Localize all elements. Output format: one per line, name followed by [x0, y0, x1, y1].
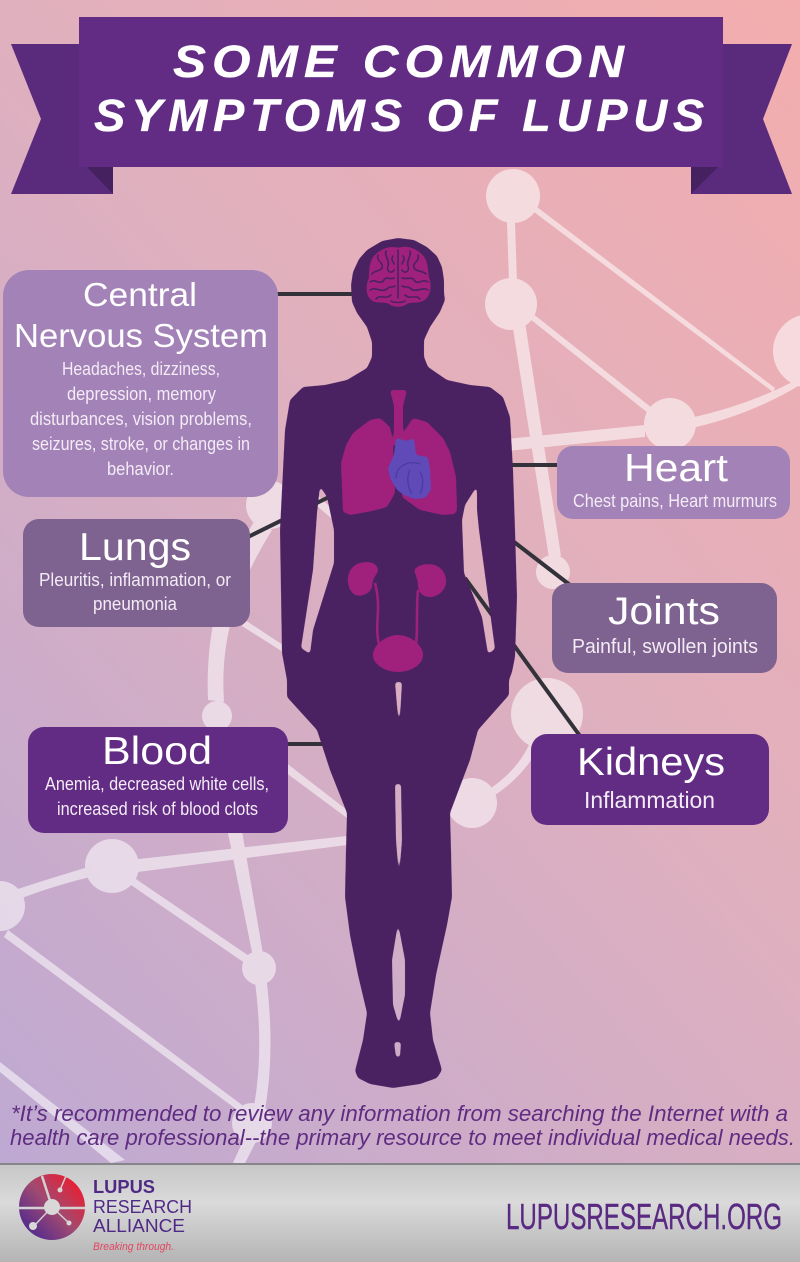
panel: blood [28, 727, 288, 833]
text: lungs symptoms: pneumonia [93, 594, 178, 614]
human body silhouette [280, 238, 517, 1088]
panel: lungs [23, 519, 250, 627]
heading: joints: Joints [608, 590, 720, 633]
connector lines [248, 294, 580, 744]
logo tagline: Breaking through. [93, 1241, 174, 1253]
panel: heart [557, 446, 790, 519]
heading: heart: Heart [624, 447, 728, 490]
title: SYMPTOMS OF LUPUS [94, 90, 710, 141]
banner [11, 17, 792, 194]
text: heart symptoms: Chest pains, Heart murmurs [573, 491, 777, 511]
heading: central nervous system: Nervous System [14, 317, 268, 354]
panel: joints [552, 583, 777, 673]
icon: lupus research alliance logo [19, 1174, 85, 1240]
heading: lungs: Lungs [79, 526, 191, 569]
text: lungs symptoms: Pleuritis, inflammation, or [39, 570, 231, 590]
panel: central nervous system [3, 270, 278, 497]
panel: kidneys [531, 734, 769, 825]
footnote: health care professional--the primary resource to meet individual medical needs. [10, 1125, 795, 1150]
banner right fold [691, 167, 718, 194]
heading: kidneys: Kidneys [577, 741, 725, 784]
banner main panel [79, 17, 723, 167]
text: central nervous system symptoms: disturbances, vision problems, [30, 409, 252, 429]
icon: lungs and trachea [341, 390, 457, 515]
banner left ribbon [11, 44, 113, 194]
heading: blood: Blood [102, 730, 212, 773]
text: central nervous system symptoms: Headaches, dizziness, [62, 359, 220, 379]
text: kidneys symptoms: Inflammation [584, 787, 715, 813]
banner right ribbon [691, 44, 792, 194]
banner left fold [87, 167, 113, 194]
title: SOME COMMON [173, 36, 630, 87]
text: joints symptoms: Painful, swollen joints [572, 636, 758, 658]
logo wordmark: RESEARCH [93, 1197, 192, 1217]
logo wordmark: ALLIANCE [93, 1216, 185, 1236]
background network pattern [0, 169, 800, 1165]
footnote: *It’s recommended to review any information from searching the Internet with a [11, 1101, 788, 1126]
text: central nervous system symptoms: seizures, stroke, or changes in [32, 434, 250, 454]
footer bar [0, 1163, 800, 1262]
text: central nervous system symptoms: behavior. [107, 459, 174, 479]
icon: kidneys and bladder [348, 562, 446, 672]
text: central nervous system symptoms: depression, memory [67, 384, 216, 404]
heading: central nervous system: Central [83, 276, 197, 313]
icon: heart [388, 438, 431, 499]
text: blood symptoms: Anemia, decreased white cells, [45, 774, 269, 794]
logo wordmark: LUPUS [93, 1177, 155, 1197]
icon: brain [366, 247, 431, 307]
logo wordmark [93, 1177, 192, 1236]
text: blood symptoms: increased risk of blood clots [57, 799, 258, 819]
